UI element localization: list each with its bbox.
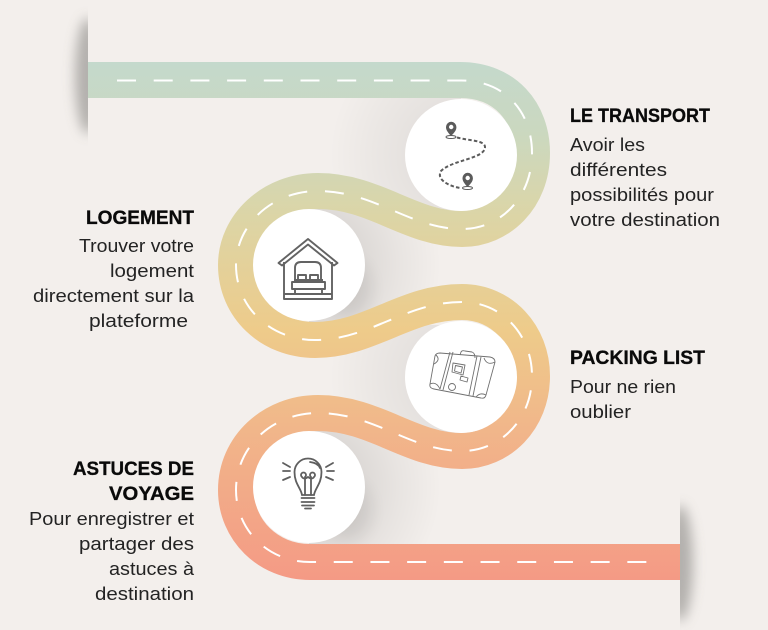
text: logement: plateforme [89, 311, 188, 331]
text: packing list: Pour ne rien [570, 377, 676, 397]
circle: map route [405, 99, 517, 211]
winding road [88, 80, 680, 562]
text: logement: Trouver votre [79, 236, 194, 256]
left road end shadow [68, 14, 88, 138]
text: packing list [570, 348, 705, 422]
text: le transport: votre destination [570, 210, 720, 230]
icon: house with bed [278, 239, 338, 299]
text: astuces de voyage: partager des [79, 534, 194, 554]
circle shadow: route [376, 98, 461, 210]
circle shadow: lodging [309, 209, 408, 322]
icon: lightbulb [283, 458, 334, 508]
circle: lodging [253, 209, 365, 321]
text: astuces de voyage: destination [95, 584, 194, 604]
text: logement: LOGEMENT [86, 208, 194, 229]
text: astuces de voyage: astuces à [109, 559, 195, 579]
icon: route with pins [440, 122, 485, 190]
text: astuces de voyage: Pour enregistrer et [29, 509, 194, 529]
right road end shadow [680, 502, 700, 624]
text: le transport: LE TRANSPORT [570, 106, 710, 127]
text: packing list: PACKING LIST [570, 348, 705, 369]
text: astuces de voyage [29, 459, 195, 604]
text: logement: directement sur la [33, 286, 195, 306]
text: astuces de voyage: VOYAGE [109, 484, 194, 505]
icon: suitcase [430, 351, 495, 398]
circle: lightbulb [253, 431, 365, 543]
text: le transport [570, 106, 720, 230]
text: le transport: Avoir les [570, 135, 645, 155]
text: le transport: possibilités pour [570, 185, 714, 205]
text: le transport: différentes [570, 160, 667, 180]
text: logement: logement [110, 261, 194, 281]
text: packing list: oublier [570, 402, 631, 422]
text: astuces de voyage: ASTUCES DE [73, 459, 194, 480]
circle shadow: suitcase [376, 325, 452, 432]
circle: suitcase [405, 321, 517, 433]
text: logement [33, 208, 195, 331]
circle shadow: lightbulb [309, 431, 408, 544]
